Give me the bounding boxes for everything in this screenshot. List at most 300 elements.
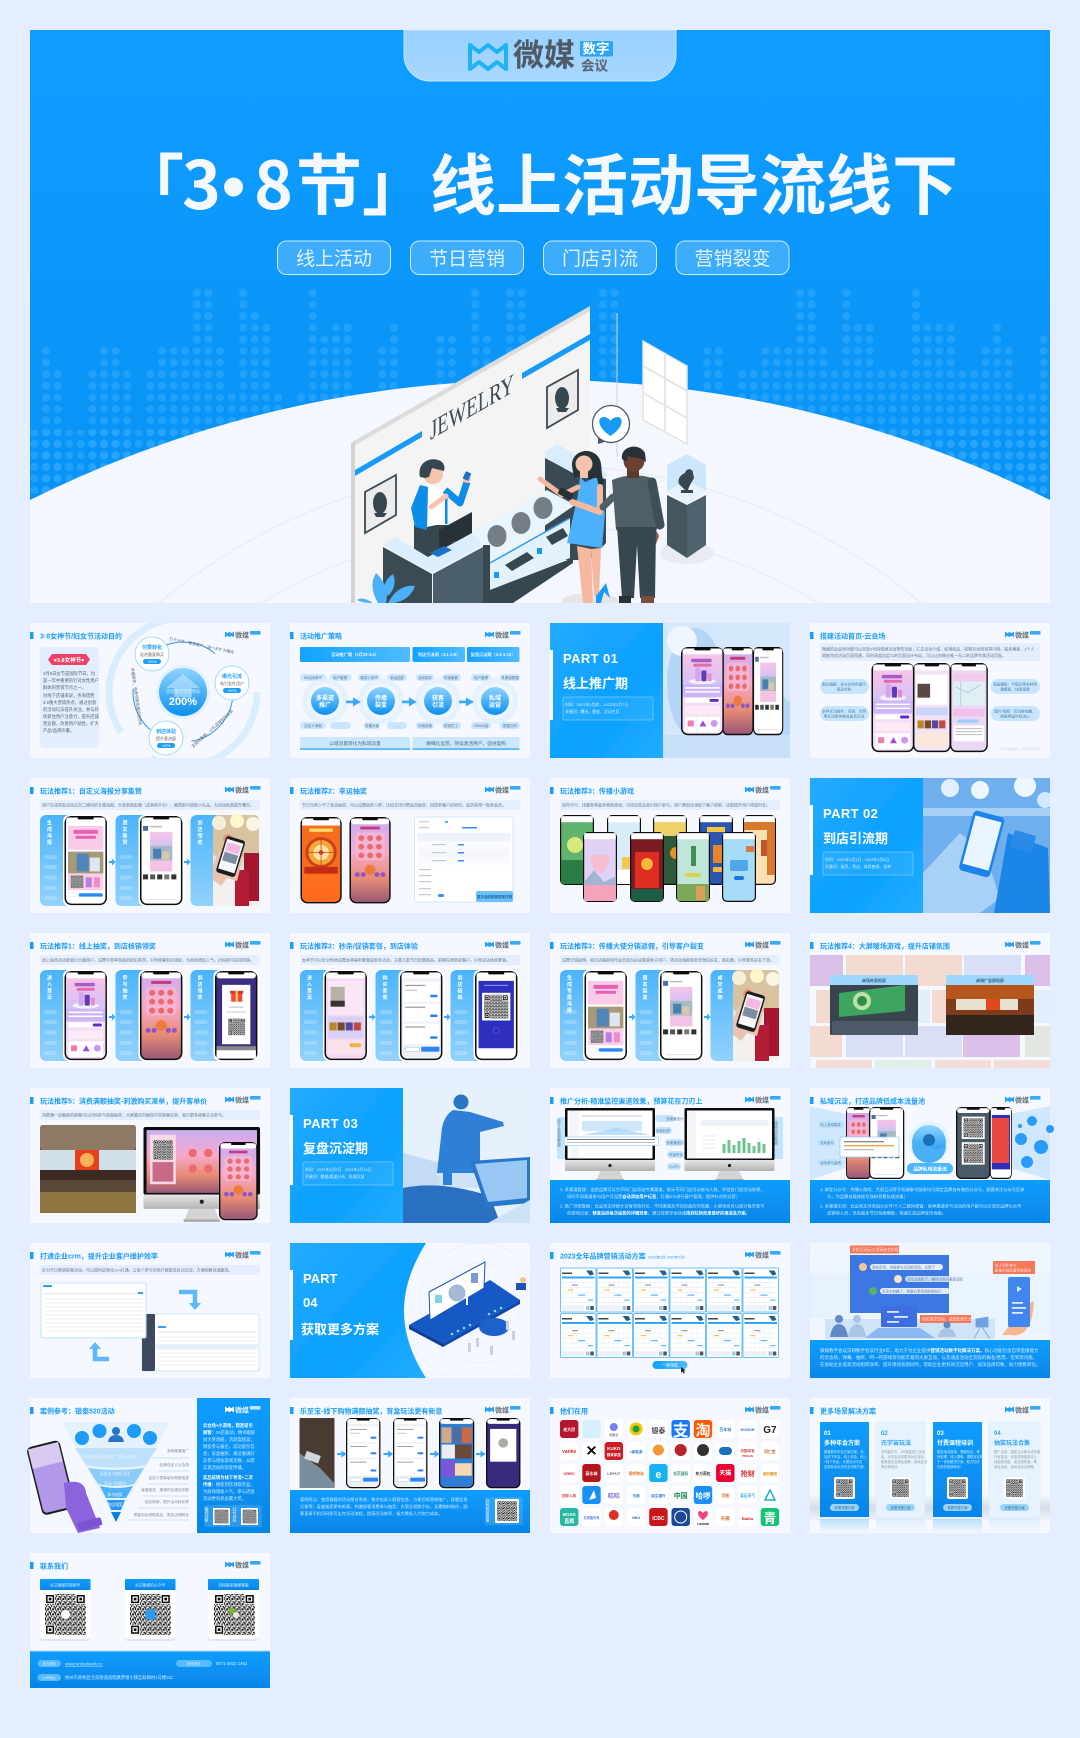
slide: promotion analysis xyxy=(550,1088,790,1223)
card 03: 师资理、线上课程、课程互动等 xyxy=(937,1454,984,1459)
logo xyxy=(485,1406,520,1414)
logo: 微媒 xyxy=(235,1250,249,1260)
client logos grid: 中国 xyxy=(674,1491,688,1500)
bottom blue note: 与，为品牌自媒体账号涨粉积累私域流量； xyxy=(827,1193,908,1200)
floor shadow xyxy=(810,1494,1050,1520)
QR card: official account xyxy=(125,1579,176,1641)
slide: ambassador xyxy=(550,933,790,1068)
logo: 微媒 xyxy=(1015,630,1029,640)
card 03: 于一体的解决方案，助力知识 xyxy=(937,1459,981,1464)
screen card: in-store xyxy=(946,975,1034,1035)
arc captions: 打卡分享，裂变推广，进一步扩大曝光 xyxy=(169,636,235,655)
funnel labels: 活动门店报名 xyxy=(104,1481,127,1486)
funnel labels: 多种渠道推广 xyxy=(167,1448,189,1453)
screen card: outdoor: 商场外屏投屏 xyxy=(862,977,886,983)
right blue panel: 为商场增加人气。参与店面 xyxy=(203,1488,255,1495)
right pedestal xyxy=(660,454,714,564)
card 02: 02 xyxy=(881,1431,888,1437)
bottom blue note: 迁移等；盲盒抽奖更有新意，刺激顾客消费参与抽奖；方案全程数字化，无需物料制作，顾 xyxy=(300,1503,468,1510)
slide: promotion strategy: 用户管理 xyxy=(333,675,347,680)
logo: 微媒 xyxy=(755,940,769,950)
node: 曝光引流: 吸引女性用户 xyxy=(220,680,244,686)
tick mark xyxy=(290,1270,293,1340)
logo xyxy=(1005,940,1040,950)
icon: heart speech bubble xyxy=(592,406,630,444)
description: 女神节可以针对性地设置女神福利套餐或秒杀活动，主推几款节日优惠商品，前期先搜到定客户，引导店店体验套餐。 xyxy=(302,956,510,962)
description: 针对节日营销获客活动，可以提供定制化crm打通，让每个参与的用户都能成自动沉淀，方便销售快速跟进。 xyxy=(42,1266,233,1272)
feature pills: 商品特色 xyxy=(837,686,852,692)
description xyxy=(560,955,780,965)
slide: CRM xyxy=(30,1243,270,1378)
social icons xyxy=(1015,1116,1054,1168)
logo: 微媒 xyxy=(235,1096,249,1104)
bottom blue note: 在协助企业提高活动组织效率、提升现场氛围同时，帮助企业更有效沉淀用户、加深品牌印象，助力销售转化。 xyxy=(820,1361,1040,1368)
bottom blue note: 案例亮点：使用微媒的活动报名系统，数字化录入顾客信息，方便后续营销推广，顾客信息 xyxy=(300,1496,468,1503)
blue panel xyxy=(550,623,663,758)
flow circles: 运营 xyxy=(489,701,501,709)
card 02 xyxy=(876,1422,928,1533)
QR card: customer service xyxy=(208,1579,259,1641)
node: 付费转化: +20% xyxy=(147,660,158,664)
logo xyxy=(485,940,520,950)
node: 曝光引流 xyxy=(215,666,249,700)
slide: PART 02 xyxy=(810,775,1053,913)
wall sign JEWELRY: JEWELRY xyxy=(430,367,514,446)
flow circles: 传播 xyxy=(375,694,387,702)
sync arrow: bottom xyxy=(89,1342,109,1359)
center growth badge: 200% xyxy=(169,696,197,708)
logo xyxy=(1005,1096,1040,1104)
card 03: 付费的营销转化！ xyxy=(937,1464,963,1469)
node: 到店体验: +40% xyxy=(161,744,172,748)
blue panel xyxy=(810,778,923,913)
client logos grid: Lazada xyxy=(697,1522,709,1526)
client logos grid: 同仁堂 xyxy=(764,1449,776,1454)
client logos grid: 顾家家居 xyxy=(607,1452,621,1457)
client logos grid: 天猫 xyxy=(719,1469,731,1477)
right blue panel: 息；盲盒抽奖，通过邀请好 xyxy=(203,1450,255,1457)
phase bars: 复盘沉淀期（3.9-3.10） xyxy=(471,651,515,658)
QR card: video channel: 关注微媒的视频号 xyxy=(50,1582,80,1588)
client logos grid: HKU xyxy=(632,1516,640,1520)
part text: 04 xyxy=(303,1295,318,1310)
client logos grid xyxy=(560,1420,779,1526)
feature pills: 图片/海报：互动更有趣， xyxy=(994,708,1036,714)
part text: PART xyxy=(303,1271,337,1286)
client logos grid: 老大房 xyxy=(563,1426,575,1432)
flow step 2: 参与抽奖 xyxy=(122,974,128,1001)
slide thumbnails grid xyxy=(26,618,1054,1688)
illustration: jewelry store xyxy=(351,306,714,609)
funnel labels: 参与抽奖 xyxy=(107,1492,123,1497)
client logos grid: 共青团中央 xyxy=(584,1515,600,1520)
logo: 微媒 xyxy=(235,1560,249,1570)
slide: promotion strategy: 裂变小游戏 xyxy=(360,675,378,680)
background game tiles xyxy=(810,955,1050,1068)
client logos grid: vanke xyxy=(562,1449,577,1455)
client logos grid: 喜运天气 xyxy=(740,1493,755,1498)
right blue panel: 扫码体验 xyxy=(232,1506,237,1523)
feature pills: 图文编辑：全方位特色展示 xyxy=(822,682,866,686)
flow step 1: 进入首页 xyxy=(46,974,52,1001)
slide: annual calendar xyxy=(550,1243,790,1378)
desktop screen xyxy=(144,1127,260,1222)
bottom blue note: 扫码体验盲盒 xyxy=(485,1498,490,1522)
tag pills: 节日营销 xyxy=(429,248,505,270)
QR card: customer service: 扫码联系微媒客服 xyxy=(218,1582,249,1588)
heading: 玩法推荐3：传播大使分销返佣，引导客户裂变 xyxy=(560,942,704,950)
blue panel: PART 02 xyxy=(823,806,878,821)
blue panel: 时间：2023年3月9日 - 2023年3月10日 xyxy=(305,1167,372,1172)
blue panel: 时间：2023年3月1日 - 2023年3月8日 xyxy=(825,857,890,862)
blue panel: PART 01 xyxy=(563,651,618,666)
description xyxy=(40,1110,260,1120)
woman customer xyxy=(540,451,618,609)
slide: PART 03 xyxy=(290,1088,530,1223)
phase bars: 活动推广期（2月28-3.6） xyxy=(331,651,379,658)
right blue panel: 微媒 xyxy=(235,1406,249,1414)
flow circles: 推广 xyxy=(319,701,331,709)
logo xyxy=(225,631,260,638)
right phones xyxy=(956,1107,1012,1179)
flow step 2: 朋友裂变 xyxy=(642,975,648,1001)
blue panel xyxy=(290,1088,403,1223)
left text card: 产品/品牌声量。 xyxy=(43,727,74,734)
slide: private traffic xyxy=(810,1088,1054,1223)
left text card: ♥3.8女神节♥ xyxy=(54,656,84,664)
logo: 微媒 xyxy=(235,940,249,950)
photo backdrop xyxy=(403,1088,530,1223)
card 03: 03 xyxy=(937,1431,944,1437)
card 01 xyxy=(820,1422,869,1533)
right blue panel: 实现活动的裂变传播。 xyxy=(203,1464,246,1471)
bottom blue note xyxy=(810,1180,1050,1223)
client logos grid: 丽水城 xyxy=(586,1470,598,1476)
feature pills xyxy=(820,679,1040,721)
logo xyxy=(745,786,780,794)
blue panel: 关键词：曝光、裂变、活动主页 xyxy=(565,709,620,714)
description: 投你不行、扭蛋寿等超多营销游戏，可添加奖品吸引用户参与，用户需到店领取下客户线索，还能提升用户停留时长。 xyxy=(562,802,770,808)
heading: 2023全年品牌营销活动方案（2023年3月-2024年2月） xyxy=(560,1252,687,1260)
red callouts: 多样互动玩法,提高参会积极 xyxy=(852,1247,899,1252)
photo backdrop xyxy=(663,623,790,758)
tiger water globe xyxy=(907,1121,953,1174)
bottom summary bars: 公域流量转化为私域流量 xyxy=(329,740,381,747)
client logos grid: G7 xyxy=(763,1425,777,1436)
crm table front xyxy=(41,1283,146,1338)
logo: 微媒 xyxy=(235,630,249,640)
right blue panel: 活动更有机会赢大奖。 xyxy=(203,1495,246,1502)
client logos grid: 百年城 xyxy=(719,1426,731,1432)
left phones xyxy=(846,1107,904,1179)
tag pills: 营销裂变 xyxy=(694,248,771,270)
red callouts: 线上同步参与 xyxy=(995,1262,1017,1268)
client logos grid: KUKO xyxy=(607,1446,621,1451)
feature pills: 海量模板：节假日等多种场 xyxy=(993,682,1037,686)
funnel labels: 奖品核销，提升活动转化率 xyxy=(145,1499,189,1504)
logo tab xyxy=(404,30,676,81)
right blue panel: 传播：顾客到店领取奖品， xyxy=(203,1481,255,1488)
client logos grid: PINGAN xyxy=(742,1454,753,1458)
part text xyxy=(301,1271,379,1337)
flow step 1: 进入首页 xyxy=(306,974,312,1001)
logo xyxy=(225,786,260,794)
side tabs xyxy=(556,1117,783,1159)
logo: 微媒 xyxy=(495,1406,509,1414)
footer contact bar: 公司地址 xyxy=(42,1675,56,1680)
logo xyxy=(745,1406,780,1414)
right blue panel: 顾客：26店联动，情书跟屏 xyxy=(203,1429,256,1436)
slide: promotion strategy: 多渠道数据 xyxy=(501,675,519,680)
channel label pills xyxy=(655,1115,684,1170)
client logos grid: 哈啰 xyxy=(696,1490,711,1500)
card 01: 01 xyxy=(824,1431,831,1437)
flow step 3 xyxy=(190,970,260,1061)
left text card: 续抓住用户注意力，提升店铺 xyxy=(43,713,100,720)
channel label pills: 停留时长 xyxy=(669,1152,683,1157)
slide: flash sale xyxy=(290,933,530,1068)
side tabs: 停留·浏览数据 xyxy=(773,1120,778,1146)
channel label pills: 多渠道统计 xyxy=(666,1116,684,1121)
arc captions xyxy=(130,636,235,749)
flow circles: 引流 xyxy=(432,701,444,709)
card 04: 整个活动，抽奖让大家对活动保 xyxy=(994,1449,1041,1454)
slide: promotion strategy: H5活动首页 xyxy=(304,675,323,680)
slide: big screen xyxy=(810,933,1050,1068)
card 01: 括线下年会、线上年会、线上 xyxy=(824,1454,868,1459)
front counter xyxy=(383,533,483,603)
flow step 3: 成交返佣 xyxy=(716,974,722,1001)
phone xyxy=(219,1142,258,1220)
store photo xyxy=(40,1125,136,1213)
white dome xyxy=(30,380,1050,603)
slide: PART 01 xyxy=(550,623,790,758)
arrow xyxy=(369,1014,376,1020)
slide: promotion strategy: …… xyxy=(394,724,401,728)
footer contact bar xyxy=(30,1650,270,1688)
right blue panel xyxy=(197,1398,270,1533)
slide: PART 04 xyxy=(290,1223,560,1383)
client logos grid: 北京国际 xyxy=(673,1471,688,1476)
crm table back xyxy=(142,1314,259,1371)
window xyxy=(643,341,687,444)
left channel labels: 互动参与 xyxy=(820,1140,834,1145)
tag pills xyxy=(278,241,789,274)
room backdrop xyxy=(810,1251,1050,1339)
blue panel: 到店引流期 xyxy=(823,831,888,846)
funnel labels: 顾客到店领取奖品，更多店铺转化 xyxy=(134,1512,189,1517)
isometric stage xyxy=(409,1262,526,1355)
client logos grid: BOSS xyxy=(563,1512,576,1517)
card 01: +线下年会。大屏互动丰富 xyxy=(824,1459,863,1464)
node: 曝光引流: +60% xyxy=(227,689,238,693)
flow step 3: 到店核销 xyxy=(456,974,462,1001)
client logos grid: 直聘 xyxy=(564,1518,574,1525)
heading: 推广分析-精准监控渠道效果，预算花在刀刃上 xyxy=(560,1096,702,1106)
title: 3 xyxy=(182,133,221,229)
funnel labels: 到店领奖 xyxy=(107,1502,123,1507)
description: 设置分销返佣，吸引店铺商利传会员成为店关裂变种子用户，将活动海报转发至微信好友、朋友圈，引导更多好友下单。 xyxy=(562,956,774,962)
slide: promotion strategy: 传播大使 xyxy=(365,723,379,728)
phase bars xyxy=(300,647,520,662)
back row phones xyxy=(560,815,776,885)
logo: 微媒 xyxy=(495,940,509,950)
feature pills: 提高停留时间进入 xyxy=(1000,714,1030,718)
flow step 1: 生成专属海报 xyxy=(566,974,572,1014)
hand holding phone xyxy=(1002,1277,1034,1335)
bottom blue note xyxy=(550,1180,790,1223)
logo xyxy=(1005,630,1040,640)
flow step 3: 到店领奖 xyxy=(196,974,202,1001)
card 02: 查看完整方案 xyxy=(890,1505,911,1510)
card 04: 查看完整方案 xyxy=(1004,1505,1025,1510)
feature pills: 等互动组件推进留资互动 xyxy=(824,714,865,718)
client logos grid: 东方雨虹 xyxy=(695,1471,711,1476)
bottom blue note: 1. 绑定公众号：传播小游戏、大屏互动等手机端参与链接均可绑定品牌自有微信公众号，顾客关注公众号后参 xyxy=(820,1186,1025,1193)
node: 付费转化 xyxy=(135,637,169,671)
logo xyxy=(745,1250,780,1260)
blue panel: 关键词：留资、到店、体验套餐、抢券 xyxy=(825,864,891,869)
tag pills: 门店引流 xyxy=(562,248,638,270)
slide: about digital meeting xyxy=(810,1243,1050,1378)
bottom blue note: 2. 多渠道引流：云会场支持添加公众号/个人二维码弹窗，各种渠道参与活动的用户都可以引流至品牌公众号 xyxy=(820,1202,1021,1210)
panel: hero cover xyxy=(30,30,1050,603)
logo tab: 数字 xyxy=(582,40,610,56)
title: 」 xyxy=(362,133,428,229)
blue panel: 线上推广期 xyxy=(563,676,628,691)
left channel labels: 活动参与留资 xyxy=(820,1160,841,1165)
heading: 私域沉淀，打造品牌低成本流量池 xyxy=(820,1096,925,1106)
node: 到店体验: 提升客流量 xyxy=(156,735,176,741)
flow step 2: 购买套餐 xyxy=(382,974,388,1001)
flow circles: 私域 xyxy=(489,694,501,702)
description xyxy=(300,955,520,965)
client logos grid: LEPUT xyxy=(607,1471,621,1476)
blue panel: 复盘沉淀期 xyxy=(303,1141,368,1156)
client logos grid: BaiDu xyxy=(742,1516,754,1521)
slide: promotion strategy: 用户管理 xyxy=(474,675,488,680)
framed pictures xyxy=(365,370,578,533)
slide: cloud venue xyxy=(810,623,1050,758)
tilted phone with scroll xyxy=(26,1440,103,1533)
bottom blue note: 的游戏记录，精准追踪每次投放的详细效果，通过效果评估快速找到拉新效果最好的渠道及方案。 xyxy=(567,1210,750,1216)
left channel labels: 线上游戏裂变 xyxy=(820,1122,841,1127)
blue panel: 时间：2023年2月底 – 2023年3月7日 xyxy=(565,702,628,707)
flow step 1 xyxy=(560,970,629,1061)
node: 曝光引流: 曝光引流 xyxy=(222,673,242,680)
red callouts xyxy=(850,1246,1035,1323)
red callouts: 影像点线后直导临高效 xyxy=(995,1268,1031,1272)
flow step 2 xyxy=(376,970,444,1061)
salesman xyxy=(411,459,472,560)
center growth badge: 活动累计销售增长 xyxy=(166,688,201,695)
QR card: video channel xyxy=(40,1579,90,1641)
left text card: 群体的营销节点之一。 xyxy=(43,684,86,691)
logo xyxy=(745,1096,780,1104)
presentation screen: 活动太精彩了，期待主办方更多活动 xyxy=(907,1276,963,1282)
client logos grid: HONOR xyxy=(741,1428,755,1432)
left text card: 的活动玩法提升关注，并与持 xyxy=(43,706,100,713)
node: 付费转化: 付费转化 xyxy=(142,644,162,651)
front row phones xyxy=(583,832,756,902)
display counters xyxy=(473,490,575,603)
side fans xyxy=(810,1106,1050,1180)
client logos grid: ●新能源 xyxy=(630,1449,643,1454)
card 04 xyxy=(989,1422,1041,1533)
client logos grid: 青 xyxy=(763,1511,776,1526)
right blue panel: 顾客参与报名，成功留存信 xyxy=(203,1443,255,1450)
slide: case Yintai xyxy=(26,1398,270,1533)
channel label pills: 多渠道统计 xyxy=(666,1140,684,1145)
client logos grid: 阿里云 xyxy=(609,1432,618,1437)
part text: 获取更多方案 xyxy=(301,1322,379,1337)
card 01: 定制年会玩法的全流程方案。 xyxy=(824,1464,867,1469)
funnel xyxy=(62,1422,170,1522)
bottom blue note xyxy=(810,1340,1050,1378)
left channel labels xyxy=(818,1121,845,1166)
settings card xyxy=(414,817,513,902)
slide: lucky draw xyxy=(290,778,530,913)
client logos grid: 国华人寿 xyxy=(562,1493,577,1498)
card 03: 裂变培训营销、课程玩法、等 xyxy=(937,1449,981,1454)
footer contact bar: 联系电话 xyxy=(187,1661,201,1666)
right blue panel: 案例详解 xyxy=(204,1506,209,1523)
left text card: 3月8日女节是国际节日，也 xyxy=(43,670,96,677)
description xyxy=(560,800,780,810)
heading: 活动推广策略 xyxy=(300,632,342,640)
description: 消费满一定额度的顾客可以扫码参与转盘抽奖，大屏幕实时展现中奖顾客信息，吸引更多顾客主动参与。 xyxy=(42,1112,226,1118)
phase bars: 到店引流期（3.1-3.8） xyxy=(418,651,460,658)
flow step 1 xyxy=(40,970,109,1061)
logo: 微媒 xyxy=(755,786,769,794)
flow circles xyxy=(302,678,518,724)
card 04: 04 xyxy=(994,1431,1001,1437)
heading: 玩法推荐1：线上抽奖，到店核销领奖 xyxy=(40,942,156,950)
screen card: outdoor xyxy=(830,975,918,1035)
arrow xyxy=(629,1014,636,1020)
left text card: 对线下店铺来说，务商借势 xyxy=(43,692,95,699)
heading: 更多场景解决方案 xyxy=(820,1406,876,1416)
side tabs: 统计·多渠道管理 xyxy=(556,1118,562,1147)
card 01: 查看完整方案 xyxy=(834,1505,855,1510)
slide: promotion strategy: 活动报名 xyxy=(418,675,432,680)
footnote: *仅作效果展示，可按需求调整 xyxy=(1000,746,1040,751)
presentation screen xyxy=(850,1255,963,1313)
description xyxy=(300,800,520,810)
description xyxy=(40,955,260,965)
arc captions: 发放优惠券、小礼品增加到店率 xyxy=(190,709,234,749)
title: 节 xyxy=(296,133,362,229)
logo: 微媒 xyxy=(755,1406,769,1414)
funnel labels: 自定义表单留存顾客信息 xyxy=(148,1475,189,1480)
calendar grid xyxy=(560,1268,778,1358)
tag pills: 线上活动 xyxy=(296,248,372,270)
client logos grid: 华图 xyxy=(722,1493,729,1498)
flow step 3 xyxy=(450,970,520,1061)
title: 8 xyxy=(254,133,293,229)
node: 到店体验: 到店体验 xyxy=(156,728,176,735)
slide: promotion strategy: 核销员工 xyxy=(444,723,458,728)
flow step 3 xyxy=(710,969,780,1061)
heading: 玩法推荐2：幸运抽奖 xyxy=(300,786,367,796)
card 02: 连，元宇宙活动更多玩法互动 xyxy=(881,1454,925,1459)
decorative dotted bar chart backdrop xyxy=(30,289,1048,499)
popup card xyxy=(840,1137,899,1157)
bottom blue note: 或营销人员，还有超多节日海报模板，快速生成品牌宣传海报。 xyxy=(827,1210,946,1216)
center growth badge xyxy=(156,665,210,719)
client logos grid: ICBC xyxy=(652,1516,665,1522)
slide: promotion strategy: 幸运抽奖 xyxy=(390,675,404,680)
